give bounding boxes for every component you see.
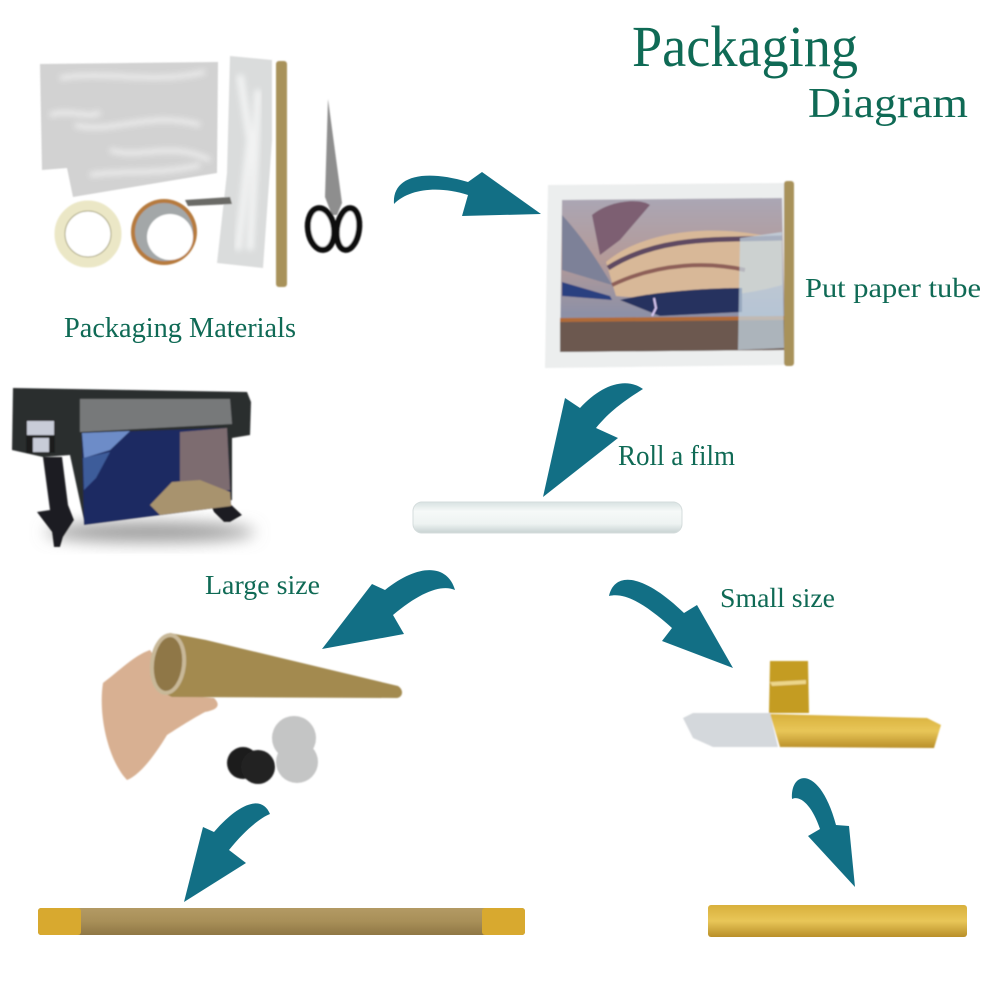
short yellow tube: [708, 905, 967, 937]
cone tube: [156, 633, 402, 698]
hand: [102, 650, 218, 780]
tape highlight: [770, 680, 806, 686]
arrow: cone to long tube: [184, 803, 270, 902]
storm image: [560, 198, 785, 352]
bubble wrap: [217, 56, 272, 268]
tape roll: white: [60, 206, 116, 262]
printer photo: [12, 388, 255, 547]
arrow: film to small size: [609, 580, 733, 668]
arrow: small tube down: [792, 778, 855, 887]
printed image: [82, 428, 231, 525]
packaging materials label: Packaging Materials: [64, 313, 296, 344]
printer legs: [37, 457, 242, 547]
scissors: [305, 99, 362, 252]
metal cover: [80, 399, 232, 432]
printer body: [12, 388, 251, 520]
tape roll: [769, 661, 809, 713]
arrow: poster to film: [543, 383, 643, 497]
ink panel: [26, 420, 55, 453]
small tube with bubble wrap and tape: [683, 661, 941, 748]
title: Packaging: [632, 14, 858, 79]
yellow taped tube: [770, 714, 941, 748]
large size label: Large size: [205, 570, 320, 600]
paper tube: [276, 61, 287, 287]
title: Diagram: [808, 81, 968, 127]
arrow: materials to poster: [394, 172, 541, 216]
plastic film sheet: [40, 62, 218, 197]
film overlay: [738, 232, 784, 350]
end caps: [227, 716, 318, 784]
tape roll: clear: [131, 197, 232, 265]
roll a film label: Roll a film: [618, 441, 735, 472]
poster paper: [545, 183, 786, 368]
title: [632, 14, 968, 127]
packaging materials photo: [40, 56, 362, 287]
tube: [784, 181, 794, 366]
floor shadow: [45, 522, 255, 542]
put paper tube label: Put paper tube: [805, 273, 981, 303]
bubble wrap end: [683, 713, 778, 747]
hand with cone tube: [102, 631, 402, 780]
white film roll: [413, 502, 682, 533]
poster photo: [545, 181, 794, 368]
long paper tube: [38, 908, 525, 935]
small size label: Small size: [720, 583, 835, 613]
arrow: film to large size: [322, 570, 455, 649]
